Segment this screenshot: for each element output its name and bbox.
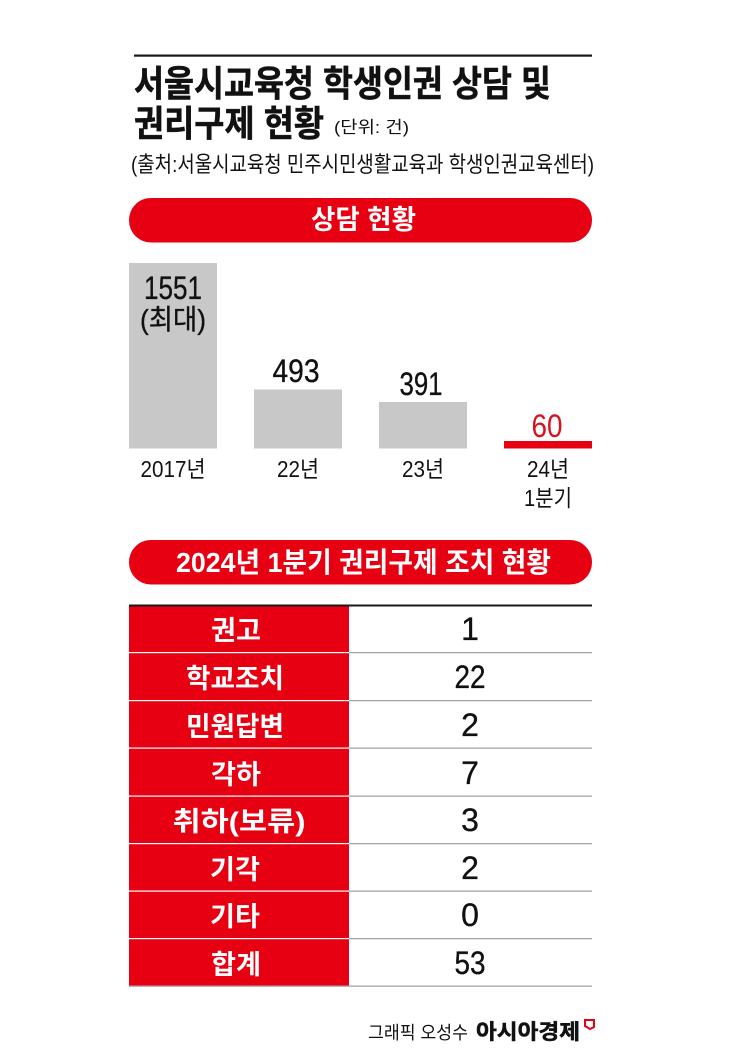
row: 취하(보류) bbox=[172, 802, 479, 838]
panel: counseling heading: 상담 현황 bbox=[311, 205, 416, 235]
table bbox=[129, 604, 592, 987]
row: 합계: 합계 bbox=[211, 950, 261, 980]
row: 권고 bbox=[211, 611, 479, 647]
row: 기각 bbox=[210, 850, 479, 886]
row: 권고: 1 bbox=[461, 611, 479, 647]
row: 권고: 권고 bbox=[211, 616, 261, 646]
bar: 24 Q1: 24년 bbox=[527, 456, 569, 482]
row: 민원답변: 민원답변 bbox=[186, 712, 284, 742]
bar chart bbox=[129, 263, 592, 511]
bar: 24 Q1: 1분기 bbox=[524, 485, 572, 511]
bar: 2017: (최대) bbox=[140, 304, 206, 335]
icon: logo mark bbox=[585, 1020, 594, 1029]
row: 각하: 각하 bbox=[211, 760, 261, 790]
row: 각하 bbox=[211, 755, 479, 791]
row: 학교조치: 22 bbox=[454, 659, 486, 695]
bar: 23: 391 bbox=[400, 366, 442, 402]
row: 기타: 0 bbox=[461, 897, 479, 933]
row: 합계 bbox=[211, 945, 486, 981]
source note: (출처:서울시교육청 민주시민생활교육과 학생인권교육센터) bbox=[131, 152, 594, 177]
row: 취하(보류): 3 bbox=[461, 802, 479, 838]
title: 서울시교육청 학생인권 상담 및 bbox=[134, 63, 551, 104]
credit: 아시아경제 bbox=[476, 1021, 580, 1044]
bar: 2017: 2017년 bbox=[140, 456, 206, 482]
bar: 2017: 1551 bbox=[144, 270, 202, 306]
header block bbox=[131, 54, 594, 177]
credit bbox=[368, 1020, 594, 1044]
bar: 22: 493 bbox=[272, 353, 320, 389]
row: 취하(보류): 취하(보류) bbox=[172, 807, 306, 837]
row: 민원답변: 2 bbox=[461, 707, 479, 743]
row: 각하: 7 bbox=[461, 755, 479, 791]
panel: remedy heading bbox=[129, 540, 592, 584]
row: 기타 bbox=[210, 897, 479, 933]
bar: 22 bbox=[254, 353, 342, 482]
unit note: (단위: 건) bbox=[334, 118, 409, 137]
panel: counseling heading bbox=[129, 198, 592, 242]
credit: 그래픽 오성수 bbox=[368, 1023, 468, 1043]
bar: 23 bbox=[379, 366, 467, 482]
title bbox=[134, 63, 551, 144]
row: 민원답변 bbox=[186, 707, 479, 743]
row: 기타: 기타 bbox=[210, 902, 260, 932]
bar: 24 Q1 bbox=[504, 408, 592, 511]
bar: 23: 23년 bbox=[402, 456, 444, 482]
bar: 24 Q1: 60 bbox=[532, 408, 562, 444]
row: 합계: 53 bbox=[454, 945, 486, 981]
bar: 2017 bbox=[129, 263, 217, 482]
panel: remedy heading: 2024년 1분기 권리구제 조치 현황 bbox=[176, 547, 551, 578]
row: 기각: 기각 bbox=[210, 855, 260, 885]
row: 학교조치: 학교조치 bbox=[186, 664, 284, 694]
title: 권리구제 현황 bbox=[134, 103, 324, 144]
bar: 22: 22년 bbox=[277, 456, 319, 482]
row: 학교조치 bbox=[186, 659, 486, 695]
row: 기각: 2 bbox=[461, 850, 479, 886]
